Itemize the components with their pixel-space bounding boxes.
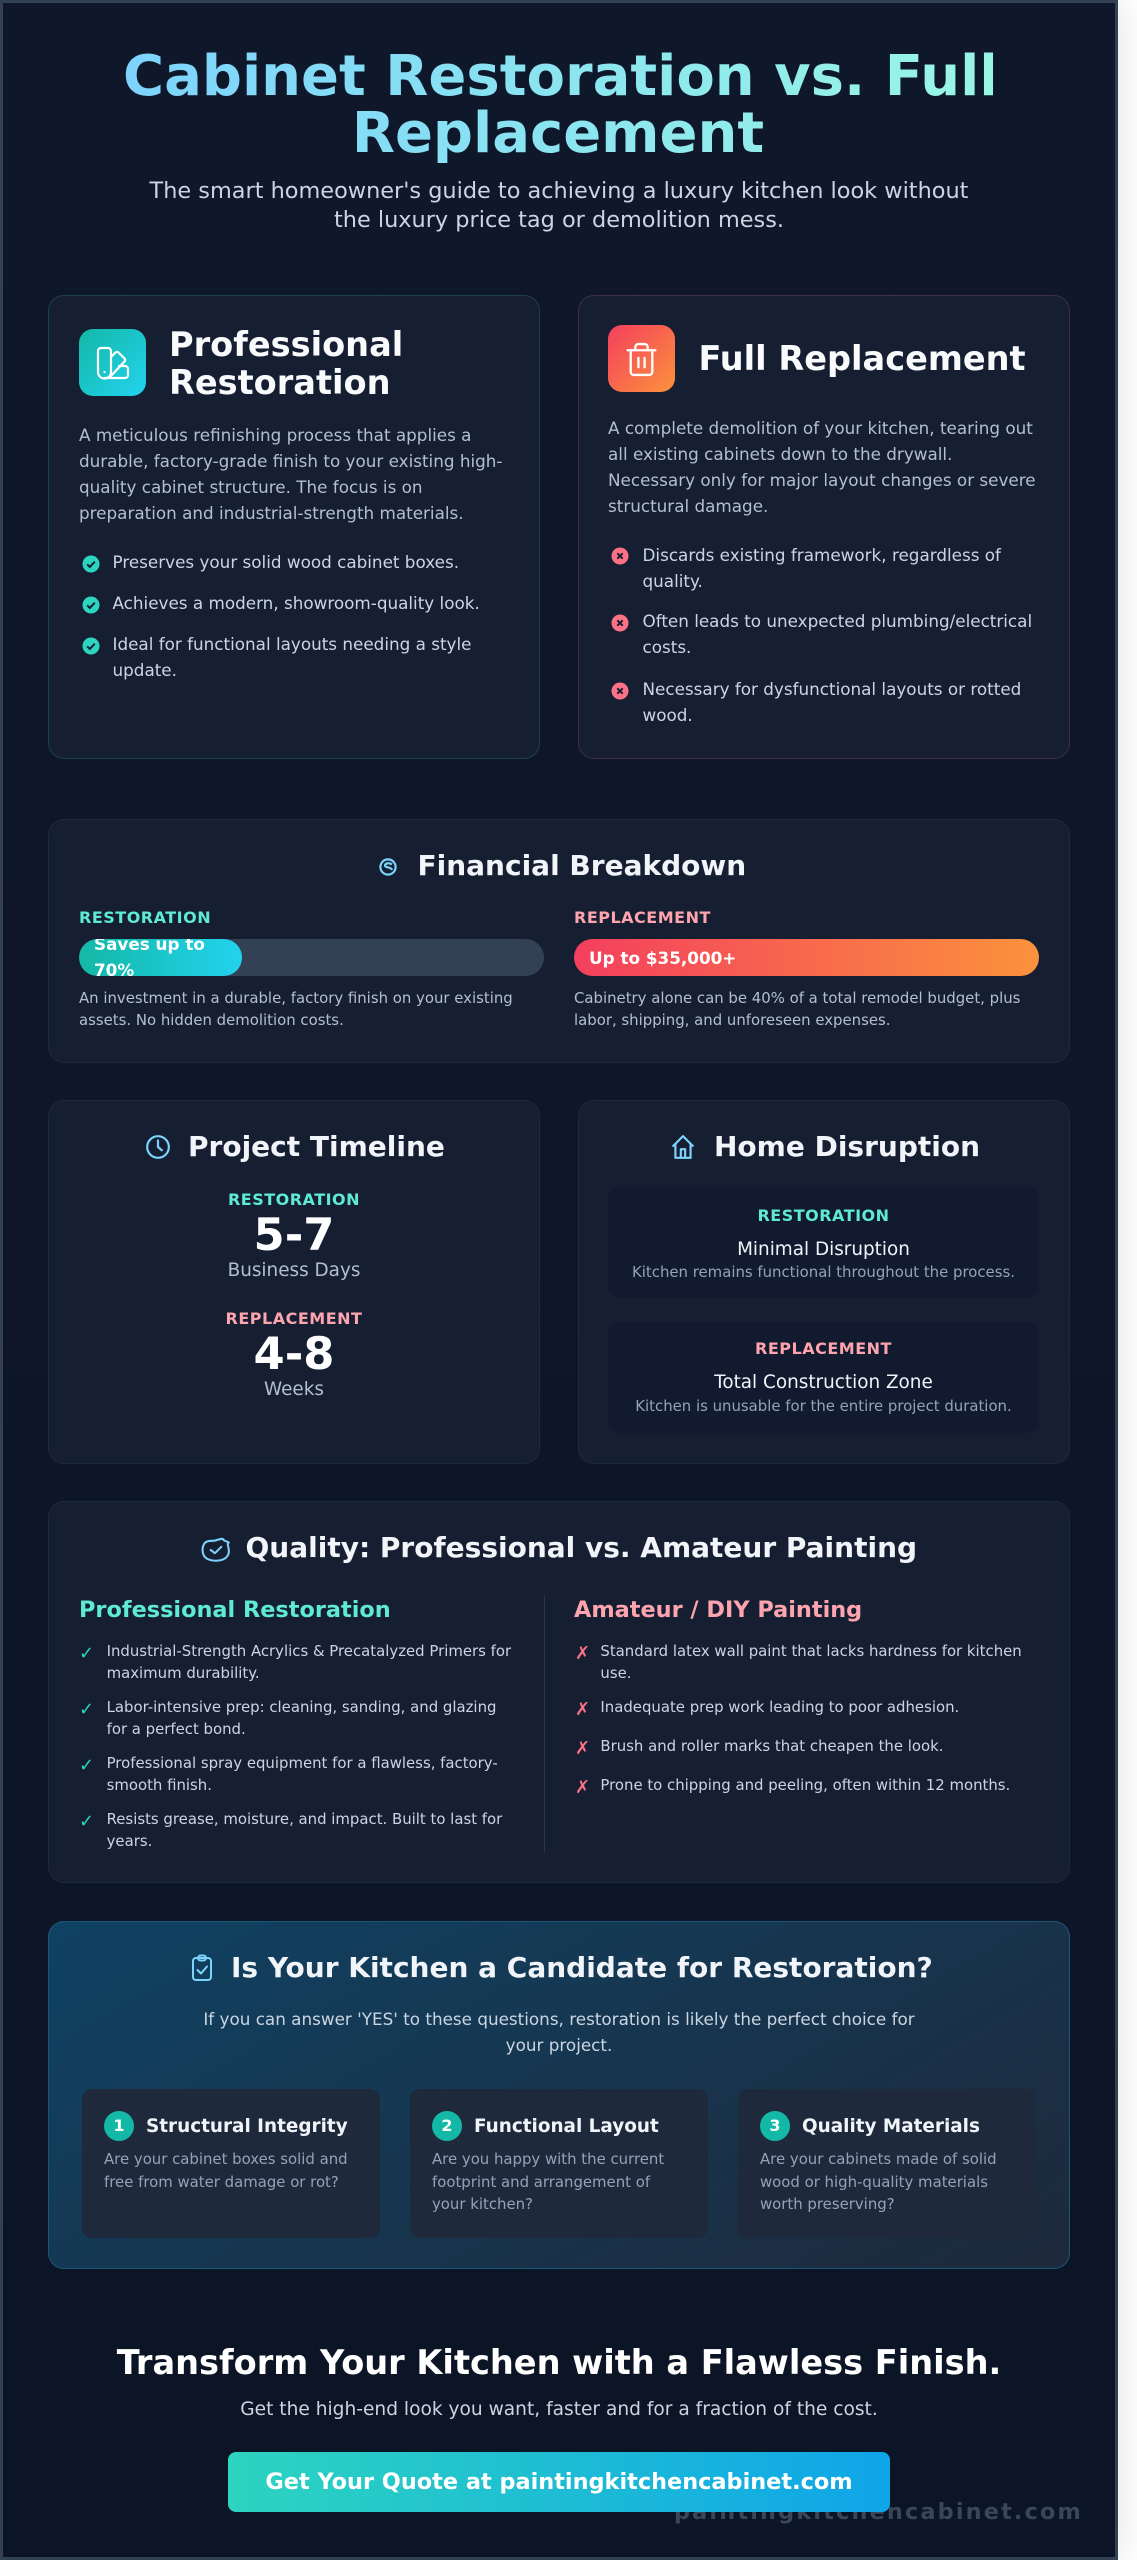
icon: swatch book bbox=[79, 329, 146, 396]
benefit: Achieves a modern, showroom-quality look. bbox=[112, 593, 480, 613]
note: restoration cost: An investment in a durable, factory finish on your existing bbox=[79, 989, 513, 1007]
drawback: costs. bbox=[642, 637, 691, 657]
card: structural integrity bbox=[82, 2089, 380, 2238]
bar: replacement bbox=[574, 939, 1039, 976]
title: Replacement bbox=[352, 101, 764, 166]
number badge: 3 bbox=[769, 2116, 781, 2135]
card: functional layout bbox=[410, 2089, 708, 2238]
mark: ✓ bbox=[79, 1643, 94, 1664]
point: Professional spray equipment for a flawless, factory- bbox=[107, 1754, 498, 1772]
subtitle: the luxury price tag or demolition mess. bbox=[334, 207, 784, 233]
heading: Professional bbox=[169, 324, 403, 364]
benefit: Preserves your solid wood cabinet boxes. bbox=[112, 552, 459, 572]
drawback: Necessary for dysfunctional layouts or rotted bbox=[642, 678, 1021, 698]
intro text bbox=[203, 2009, 915, 2055]
panel: home disruption bbox=[578, 1100, 1070, 1464]
description bbox=[608, 418, 1036, 516]
card text: Are your cabinet boxes solid and bbox=[104, 2150, 348, 2168]
label: restoration: RESTORATION bbox=[79, 908, 211, 927]
description: quality cabinet structure. The focus is on bbox=[79, 477, 423, 497]
point: use. bbox=[600, 1664, 631, 1682]
note: replacement cost: labor, shipping, and unforeseen expenses. bbox=[574, 1011, 890, 1029]
drawback bbox=[642, 545, 1002, 591]
drawback: Discards existing framework, regardless of bbox=[642, 545, 1001, 565]
panel: candidate checklist bbox=[48, 1921, 1070, 2269]
mark: ✓ bbox=[79, 1755, 94, 1776]
bar: restoration bbox=[79, 939, 544, 976]
icon: clipboard check bbox=[192, 1954, 212, 1981]
mark: ✗ bbox=[575, 1643, 590, 1664]
point: for a perfect bond. bbox=[107, 1720, 246, 1738]
card title: Functional Layout bbox=[474, 2116, 659, 2137]
point: years. bbox=[107, 1832, 152, 1850]
drawback: Often leads to unexpected plumbing/electrical bbox=[642, 611, 1032, 631]
unit: Weeks bbox=[264, 1379, 324, 1400]
description: durable, factory-grade finish to your existing high- bbox=[79, 451, 502, 471]
intro text: If you can answer 'YES' to these questions, restoration is likely the perfect choice for bbox=[203, 2009, 915, 2029]
card: quality materials bbox=[738, 2089, 1036, 2238]
description bbox=[79, 425, 502, 523]
subheading: amateur: Amateur / DIY Painting bbox=[574, 1597, 862, 1623]
panel: project timeline bbox=[48, 1100, 540, 1464]
description: A complete demolition of your kitchen, tearing out bbox=[608, 418, 1033, 438]
call to action button: Get Your Quote at paintingkitchencabinet.com bbox=[265, 2469, 853, 2495]
point bbox=[107, 1642, 512, 1682]
point: smooth finish. bbox=[107, 1776, 212, 1794]
drawback bbox=[642, 611, 1032, 657]
icon: check bbox=[82, 556, 100, 572]
benefit: update. bbox=[112, 660, 177, 680]
panel: professional restoration bbox=[48, 295, 540, 759]
icon: paint quality badge bbox=[202, 1538, 230, 1562]
icon: check bbox=[82, 638, 100, 654]
point: Standard latex wall paint that lacks hardness for kitchen bbox=[600, 1642, 1022, 1660]
stat: replacement duration: 4-8 bbox=[254, 1327, 334, 1380]
card text: wood or high-quality materials bbox=[760, 2173, 988, 2191]
point: Labor-intensive prep: cleaning, sanding, and glazing bbox=[107, 1698, 496, 1716]
card title: Quality Materials bbox=[802, 2116, 980, 2137]
card text bbox=[104, 2150, 348, 2191]
call to action button bbox=[228, 2452, 890, 2512]
title: Cabinet Restoration vs. Full bbox=[123, 44, 998, 108]
subtitle bbox=[149, 178, 968, 233]
level: Total Construction Zone bbox=[714, 1372, 933, 1393]
label: replacement: REPLACEMENT bbox=[226, 1309, 362, 1328]
card text: footprint and arrangement of bbox=[432, 2173, 650, 2191]
panel: financial breakdown bbox=[48, 819, 1070, 1063]
watermark: paintingkitchencabinet.com bbox=[674, 2499, 1083, 2525]
bar value: Up to $35,000+ bbox=[589, 948, 736, 968]
box: replacement disruption bbox=[608, 1322, 1039, 1433]
number badge bbox=[432, 2111, 462, 2141]
description: Necessary only for major layout changes or severe bbox=[608, 470, 1036, 490]
drawback bbox=[642, 678, 1021, 724]
heading bbox=[169, 324, 403, 402]
heading: Restoration bbox=[169, 362, 390, 402]
number badge bbox=[104, 2111, 134, 2141]
box: restoration disruption bbox=[608, 1187, 1039, 1298]
bar fill: saves up to 70% bbox=[79, 939, 242, 976]
note: restoration cost: assets. No hidden demolition costs. bbox=[79, 1011, 344, 1029]
mark: ✓ bbox=[79, 1699, 94, 1720]
icon: coin bbox=[379, 858, 397, 876]
icon: clock bbox=[146, 1135, 170, 1159]
point: Industrial-Strength Acrylics & Precatalyzed Primers for bbox=[107, 1642, 511, 1660]
intro text: your project. bbox=[506, 2035, 612, 2055]
card text: your kitchen? bbox=[432, 2195, 533, 2213]
drawback: quality. bbox=[642, 571, 703, 591]
description: preparation and industrial-strength materials. bbox=[79, 503, 464, 523]
heading: Project Timeline bbox=[188, 1130, 445, 1163]
icon: x bbox=[612, 548, 628, 564]
note: replacement cost: Cabinetry alone can be 40% of a total remodel budget, plus bbox=[574, 989, 1020, 1007]
point: maximum durability. bbox=[107, 1664, 260, 1682]
point bbox=[107, 1810, 502, 1850]
number badge: 2 bbox=[441, 2116, 453, 2135]
mark: ✓ bbox=[79, 1811, 94, 1832]
icon: x bbox=[612, 682, 628, 700]
point: Brush and roller marks that cheapen the look. bbox=[600, 1736, 943, 1754]
icon: house bbox=[672, 1135, 694, 1159]
heading: Full Replacement bbox=[698, 339, 1026, 378]
icon: check bbox=[82, 596, 100, 614]
card text bbox=[432, 2150, 664, 2213]
label: REPLACEMENT bbox=[755, 1339, 892, 1358]
mark: ✗ bbox=[575, 1699, 590, 1720]
icon: trash bbox=[608, 325, 675, 392]
point bbox=[107, 1754, 498, 1794]
closing text: Get the high-end look you want, faster and for a fraction of the cost. bbox=[240, 2399, 878, 2420]
card text: Are your cabinets made of solid bbox=[760, 2150, 997, 2168]
heading: Financial Breakdown bbox=[418, 849, 746, 882]
stat: restoration duration: 5-7 bbox=[254, 1208, 334, 1261]
description: structural damage. bbox=[608, 496, 768, 516]
description: all existing cabinets down to the drywall. bbox=[608, 444, 952, 464]
number badge bbox=[760, 2111, 790, 2141]
unit: Business Days bbox=[228, 1260, 360, 1281]
description: A meticulous refinishing process that applies a bbox=[79, 425, 471, 445]
label: restoration: RESTORATION bbox=[228, 1190, 360, 1209]
card text: Are you happy with the current bbox=[432, 2150, 664, 2168]
benefit bbox=[112, 634, 471, 680]
mark: ✗ bbox=[575, 1738, 590, 1759]
title bbox=[123, 48, 993, 163]
number badge: 1 bbox=[113, 2116, 125, 2135]
panel: full replacement bbox=[578, 295, 1070, 759]
benefit: Ideal for functional layouts needing a style bbox=[112, 634, 471, 654]
drawback: wood. bbox=[642, 704, 693, 724]
label: replacement: REPLACEMENT bbox=[574, 908, 711, 927]
card text: free from water damage or rot? bbox=[104, 2173, 339, 2191]
point bbox=[600, 1642, 1022, 1682]
point: Resists grease, moisture, and impact. Built to last for bbox=[107, 1810, 502, 1828]
heading: Home Disruption bbox=[714, 1130, 980, 1163]
point bbox=[106, 1698, 496, 1738]
label: RESTORATION bbox=[757, 1206, 890, 1224]
detail: Kitchen remains functional throughout the process. bbox=[632, 1263, 1015, 1281]
heading: Quality: Professional vs. Amateur Painting bbox=[246, 1531, 917, 1564]
level: Minimal Disruption bbox=[737, 1238, 910, 1260]
icon: x bbox=[612, 614, 628, 632]
card title: Structural Integrity bbox=[146, 2116, 348, 2137]
point: Prone to chipping and peeling, often within 12 months. bbox=[600, 1776, 1010, 1794]
point: Inadequate prep work leading to poor adhesion. bbox=[600, 1698, 959, 1716]
note: restoration cost bbox=[79, 989, 513, 1029]
note: replacement cost bbox=[574, 989, 1020, 1029]
mark: ✗ bbox=[575, 1777, 590, 1798]
card text: worth preserving? bbox=[760, 2195, 895, 2213]
subheading: professional: Professional Restoration bbox=[79, 1597, 391, 1623]
bar value bbox=[94, 939, 205, 976]
heading: Is Your Kitchen a Candidate for Restoration? bbox=[231, 1950, 933, 1984]
panel: quality comparison bbox=[48, 1501, 1070, 1883]
subtitle: The smart homeowner's guide to achieving a luxury kitchen look without bbox=[150, 178, 968, 204]
detail: Kitchen is unusable for the entire project duration. bbox=[635, 1397, 1012, 1415]
card text bbox=[760, 2150, 997, 2213]
closing heading: Transform Your Kitchen with a Flawless Finish. bbox=[117, 2343, 1001, 2382]
